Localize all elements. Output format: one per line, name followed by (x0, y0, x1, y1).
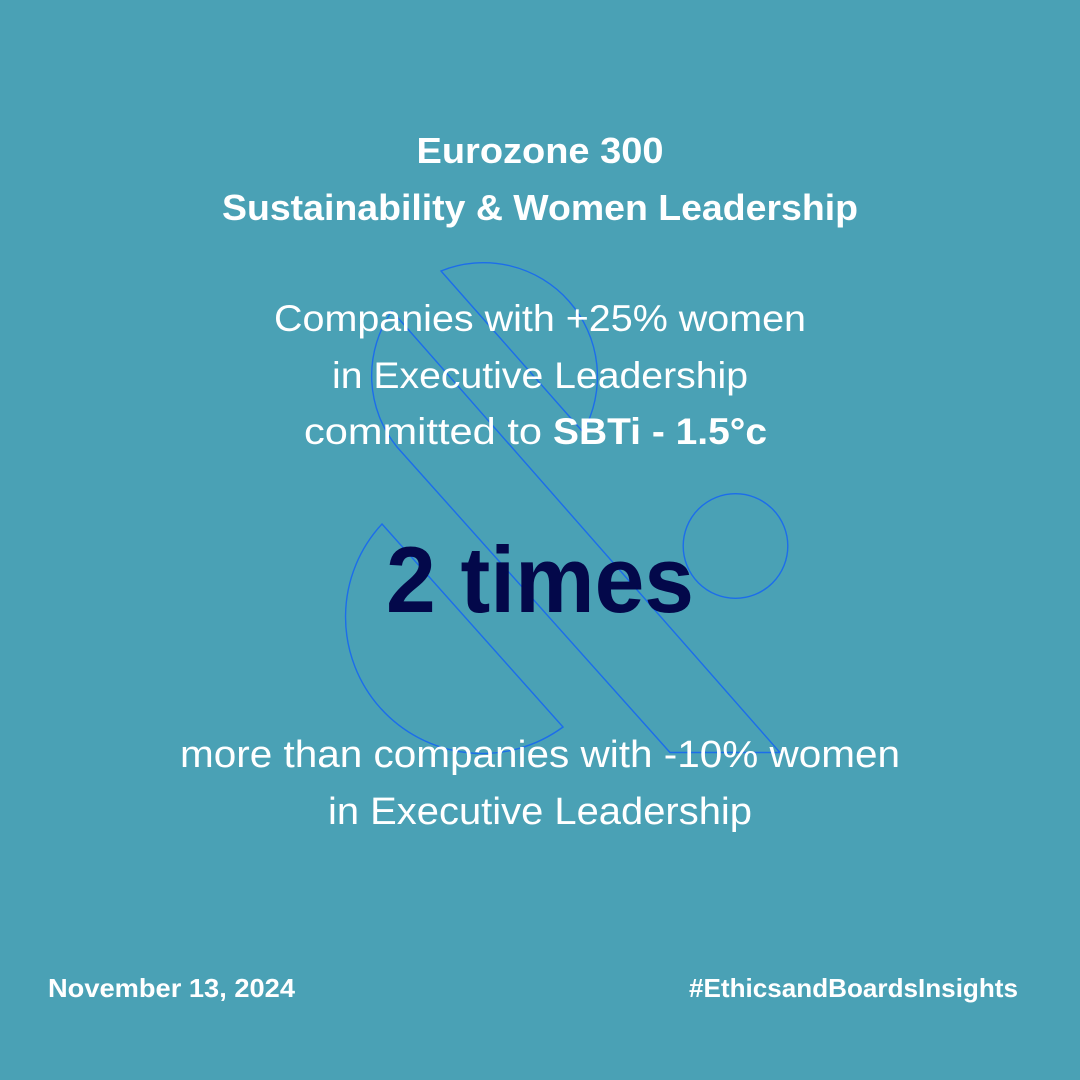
title: Eurozone 300 (416, 130, 664, 171)
text block: companies with more women: committed to (304, 411, 542, 452)
shape: top circle segment (441, 263, 597, 432)
text block: comparison: more than companies with -10% women (180, 734, 900, 776)
shape: lower circle segment (346, 524, 563, 753)
footer hashtag: #EthicsandBoardsInsights (689, 973, 1018, 1003)
text block: companies with more women: in Executive Leadership (332, 355, 748, 396)
text block: companies with more women: Companies with +25% women (274, 298, 806, 339)
text block: comparison: in Executive Leadership (328, 791, 752, 833)
shape: diagonal stripe with rounded end (372, 311, 780, 752)
key figure: 2 times: 2 times (386, 527, 694, 632)
text block: companies with more women: SBTi - 1.5°c (553, 411, 767, 452)
decorative outline shapes (346, 263, 788, 753)
title (222, 130, 858, 228)
text block: companies with more women (274, 298, 806, 452)
title: Sustainability & Women Leadership (222, 187, 858, 228)
text block: comparison (180, 734, 900, 833)
footer date: November 13, 2024 (48, 973, 296, 1003)
shape: small circle (683, 494, 788, 598)
